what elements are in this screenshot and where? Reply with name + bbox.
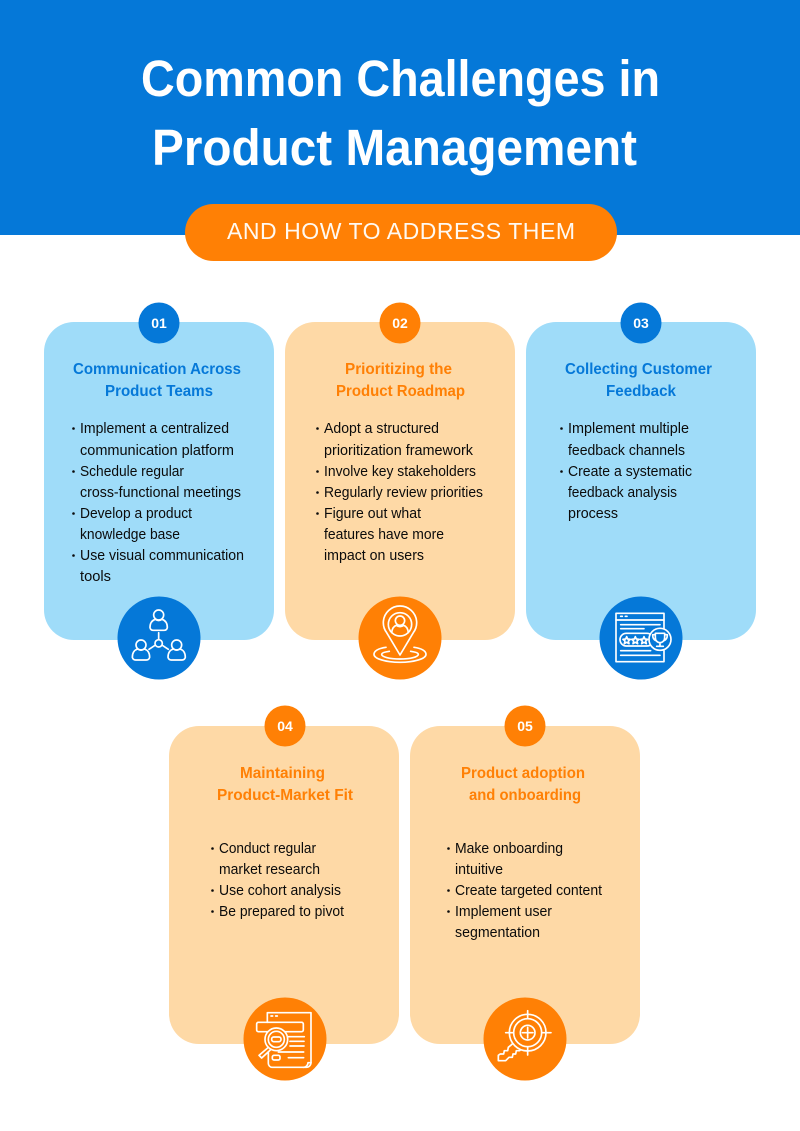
- number badge 05: [504, 706, 546, 746]
- bullet list 02: impact on users: [324, 548, 424, 564]
- bullet list 02: prioritization framework: [324, 443, 474, 459]
- bullet list 02: [316, 421, 483, 564]
- heading 05: Product adoption: [461, 765, 585, 782]
- number badge 05: 05: [517, 718, 533, 734]
- bullet list 02: Involve key stakeholders: [324, 464, 476, 480]
- icon: review window with trophy: [600, 596, 682, 680]
- bullet list 01: [72, 421, 244, 585]
- heading 04: [217, 765, 354, 804]
- bullet list 01: knowledge base: [80, 527, 180, 543]
- bullet list 02: features have more: [324, 527, 444, 543]
- panel: 03 customer feedback: [526, 302, 756, 680]
- heading 03: [565, 361, 712, 400]
- bullet list 01: Use visual communication: [80, 548, 244, 564]
- bullet list 02: Figure out what: [324, 506, 421, 522]
- heading 03: Collecting Customer: [565, 361, 712, 378]
- bullet list 04: market research: [219, 862, 320, 878]
- bullet list 04: Use cohort analysis: [219, 883, 341, 899]
- icon: key with target: [484, 998, 566, 1080]
- number badge 02: 02: [392, 315, 408, 331]
- heading 01: Product Teams: [105, 383, 213, 400]
- bullet list 01: cross-functional meetings: [80, 485, 241, 501]
- bullet list 04: [211, 841, 344, 920]
- number badge 02: [380, 302, 420, 344]
- number badge 03: [620, 302, 662, 344]
- bullet list 05: intuitive: [455, 862, 503, 878]
- bullet list 05: Create targeted content: [455, 883, 602, 899]
- title: [141, 50, 660, 176]
- bullet list 01: Schedule regular: [80, 464, 184, 480]
- bullet list 03: Implement multiple: [568, 421, 689, 437]
- heading 02: [336, 361, 465, 400]
- bullet list 01: tools: [80, 569, 111, 585]
- bullet list 03: feedback analysis: [568, 485, 677, 501]
- bullet list 04: Conduct regular: [219, 841, 316, 857]
- icon: document with magnifier: [244, 998, 326, 1080]
- bullet list 04: Be prepared to pivot: [219, 904, 344, 920]
- heading 01: [73, 361, 241, 400]
- bullet list 05: [447, 841, 602, 941]
- heading 05: [461, 765, 585, 804]
- bullet list 02: Adopt a structured: [324, 421, 439, 437]
- panel: 04 product-market fit: [169, 706, 399, 1080]
- icon: connected team: [118, 596, 200, 680]
- heading 02: Prioritizing the: [345, 361, 452, 378]
- number badge 04: 04: [277, 718, 293, 734]
- icon: location pin with user: [358, 596, 442, 680]
- bullet list 01: Develop a product: [80, 506, 192, 522]
- title: Product Management: [152, 119, 637, 176]
- bullet list 03: process: [568, 506, 618, 522]
- bullet list 03: [560, 421, 692, 522]
- title: Common Challenges in: [141, 50, 660, 107]
- bullet list 03: Create a systematic: [568, 464, 692, 480]
- heading 02: Product Roadmap: [336, 383, 465, 400]
- panel: 02 prioritizing: [285, 302, 515, 680]
- bullet list 05: segmentation: [455, 925, 540, 941]
- heading 03: Feedback: [606, 383, 676, 400]
- subtitle pill: [185, 204, 617, 261]
- bullet list 01: communication platform: [80, 443, 234, 459]
- bullet list 03: feedback channels: [568, 443, 685, 459]
- heading 01: Communication Across: [73, 361, 241, 378]
- panel: 05 adoption and onboarding: [410, 706, 640, 1080]
- heading 04: Product-Market Fit: [217, 787, 354, 804]
- panel: 01 communication: [44, 302, 274, 680]
- subtitle pill: AND HOW TO ADDRESS THEM: [227, 218, 575, 244]
- heading 05: and onboarding: [469, 787, 581, 804]
- bullet list 05: Implement user: [455, 904, 552, 920]
- number badge 03: 03: [633, 315, 649, 331]
- number badge 01: [138, 302, 180, 344]
- number badge 01: 01: [151, 315, 167, 331]
- number badge 04: [264, 706, 306, 746]
- bullet list 01: Implement a centralized: [80, 421, 229, 437]
- bullet list 02: Regularly review priorities: [324, 485, 483, 501]
- bullet list 05: Make onboarding: [455, 841, 563, 857]
- heading 04: Maintaining: [240, 765, 325, 782]
- header band: [0, 0, 800, 235]
